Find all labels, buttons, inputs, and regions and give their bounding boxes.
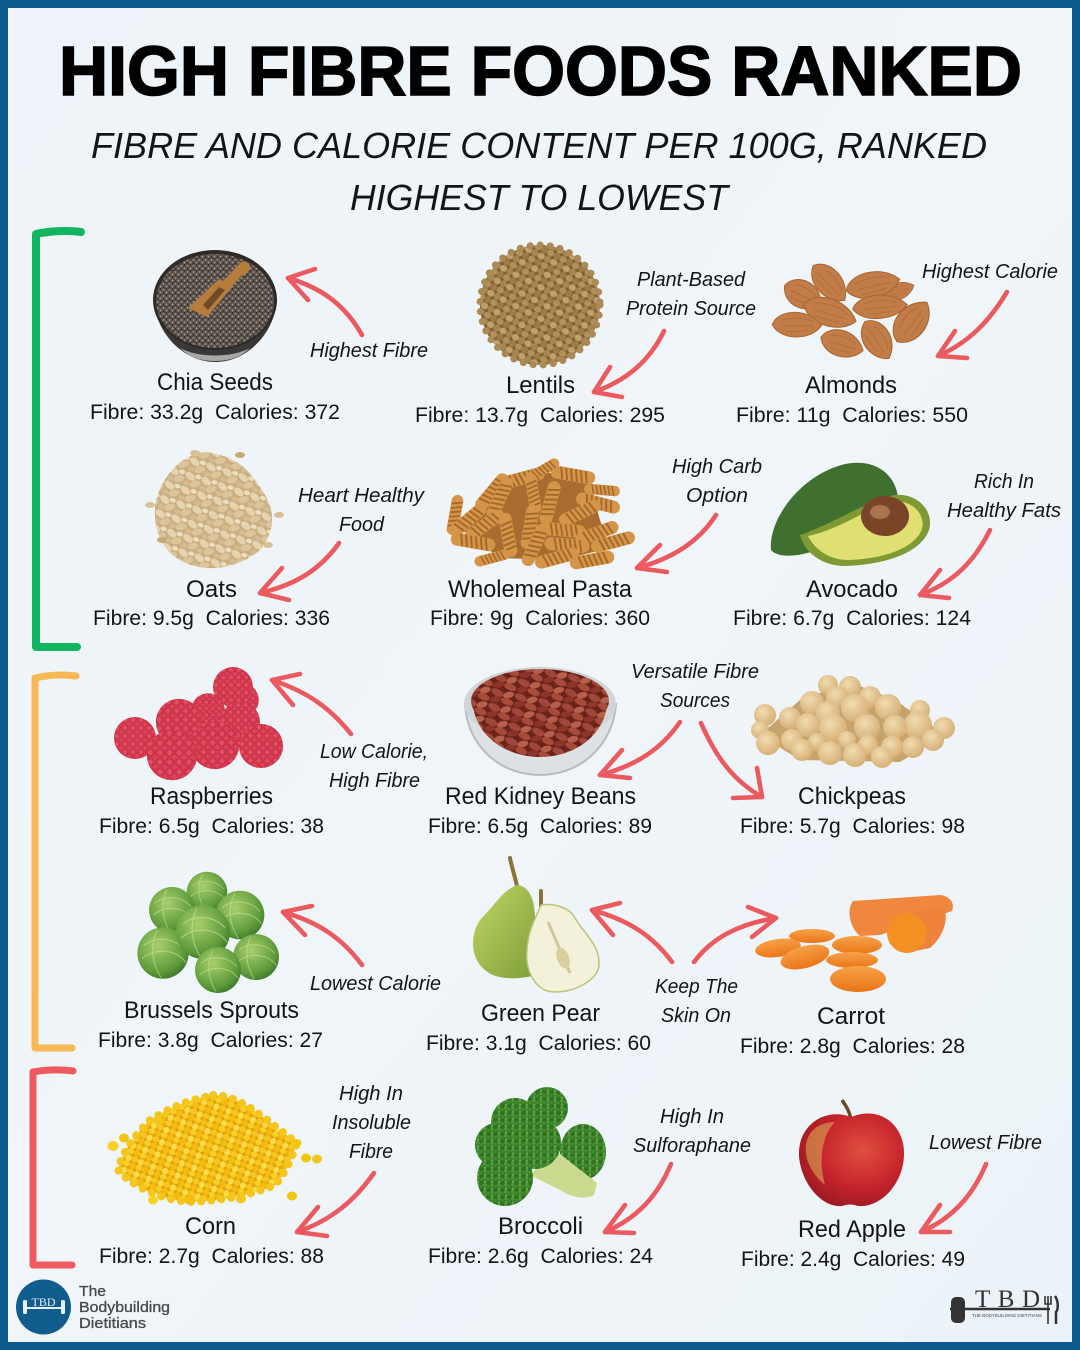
callout: high carb: Option bbox=[686, 484, 748, 507]
callout: versatile fibre bbox=[631, 660, 759, 712]
callout: heart healthy bbox=[298, 484, 426, 536]
icon: chia bowl bbox=[153, 250, 277, 362]
callout: high in insoluble fibre: Insoluble bbox=[332, 1111, 411, 1134]
food: Lentils: Lentils bbox=[506, 372, 575, 399]
callout: lowest calorie: Lowest Calorie bbox=[310, 972, 441, 995]
food: Almonds: Almonds bbox=[805, 372, 897, 399]
callout: keep the skin on: Keep The bbox=[655, 975, 738, 998]
food: Red Apple bbox=[741, 1100, 965, 1271]
icon: fusilli pile bbox=[447, 459, 630, 569]
food: Oats: Fibre: 9.5g Calories: 336 bbox=[93, 606, 330, 630]
food: Oats bbox=[93, 450, 330, 630]
callout: highest fibre: Highest Fibre bbox=[310, 339, 428, 362]
icon: pear whole and halved bbox=[473, 858, 599, 992]
food: Brussels Sprouts: Brussels Sprouts bbox=[124, 997, 299, 1024]
arrow: avocado bbox=[920, 530, 990, 598]
arrow: chia bbox=[288, 269, 362, 335]
food: Corn: Corn bbox=[185, 1213, 236, 1240]
callout: high in insoluble fibre: Fibre bbox=[349, 1140, 393, 1163]
food: Brussels Sprouts bbox=[98, 872, 323, 1052]
food: Broccoli: Broccoli bbox=[498, 1213, 583, 1240]
callout: lowest fibre: Lowest Fibre bbox=[929, 1131, 1042, 1154]
logo: The Bodybuilding Dietitians: Dietitians bbox=[79, 1315, 146, 1332]
food: Wholemeal Pasta bbox=[430, 459, 650, 630]
callout: heart healthy: Heart Healthy bbox=[298, 484, 426, 507]
title: HIGH FIBRE FOODS RANKED bbox=[59, 32, 1022, 110]
food: Broccoli: Fibre: 2.6g Calories: 24 bbox=[428, 1244, 653, 1268]
icon: glass bowl of beans bbox=[464, 667, 616, 775]
callout: low calorie bbox=[320, 740, 428, 792]
arrow: beans bbox=[600, 722, 680, 778]
food: Avocado: Avocado bbox=[806, 576, 898, 603]
food: Green Pear bbox=[426, 858, 651, 1055]
food: Chickpeas: Chickpeas bbox=[798, 783, 906, 810]
callout: high carb bbox=[672, 455, 762, 507]
callout: high in insoluble fibre: High In bbox=[339, 1082, 403, 1105]
callout: plant-based bbox=[626, 268, 756, 320]
callout: rich in: Rich In bbox=[974, 470, 1034, 493]
food: Red Kidney Beans: Red Kidney Beans bbox=[445, 783, 636, 810]
logo: The Bodybuilding Dietitians: Bodybuilding bbox=[79, 1299, 170, 1316]
icon: chickpeas pile bbox=[751, 675, 955, 768]
arrow: carrot bbox=[694, 907, 776, 962]
logo: TBD barbell: THE BODYBUILDING DIETITIANS bbox=[972, 1313, 1042, 1318]
arrow: oats bbox=[260, 543, 339, 600]
callout: keep the skin on: Skin On bbox=[661, 1004, 731, 1027]
food: Red Apple: Fibre: 2.4g Calories: 49 bbox=[741, 1247, 965, 1271]
logo: TBD barbell: TBD bbox=[975, 1286, 1040, 1313]
food: Carrot: Carrot bbox=[817, 1003, 885, 1030]
food: Red Apple: Red Apple bbox=[798, 1216, 906, 1243]
callout: rich in: Healthy Fats bbox=[947, 499, 1061, 522]
callout: plant-based: Protein Source bbox=[626, 297, 756, 320]
callout: rich in bbox=[947, 470, 1061, 522]
food: Corn: Fibre: 2.7g Calories: 88 bbox=[99, 1244, 324, 1268]
food: Raspberries: Fibre: 6.5g Calories: 38 bbox=[99, 814, 324, 838]
icon: oats pile bbox=[145, 450, 284, 568]
arrow: raspberries bbox=[272, 674, 351, 734]
food: Green Pear: Green Pear bbox=[481, 1000, 600, 1027]
logo: The Bodybuilding Dietitians: The bbox=[79, 1283, 106, 1300]
arrow: almonds bbox=[938, 292, 1007, 358]
food: Lentils: Fibre: 13.7g Calories: 295 bbox=[415, 403, 665, 427]
bracket: green tier bbox=[36, 231, 81, 647]
subtitle: HIGHEST TO LOWEST bbox=[350, 177, 731, 218]
bracket: red tier bbox=[33, 1070, 73, 1265]
icon: carrot slices bbox=[754, 895, 953, 992]
food: Chickpeas: Fibre: 5.7g Calories: 98 bbox=[740, 814, 965, 838]
callout: keep the skin on bbox=[655, 975, 738, 1027]
food: Raspberries: Raspberries bbox=[150, 783, 273, 810]
arrow: brussels sprouts bbox=[283, 906, 362, 965]
arrow: chickpeas bbox=[701, 723, 762, 798]
logo: The Bodybuilding Dietitians: TBD bbox=[32, 1295, 56, 1309]
icon: almonds bbox=[772, 257, 939, 366]
callout: versatile fibre: Versatile Fibre bbox=[631, 660, 759, 683]
logo: TBD barbell bbox=[950, 1286, 1058, 1324]
arrow: pasta bbox=[637, 515, 716, 572]
food: Corn bbox=[99, 1095, 324, 1268]
food: Carrot: Fibre: 2.8g Calories: 28 bbox=[740, 1034, 965, 1058]
logo: The Bodybuilding Dietitians bbox=[16, 1280, 170, 1334]
food: Carrot bbox=[740, 895, 965, 1058]
callout: high carb: High Carb bbox=[672, 455, 762, 478]
icon: avocado bbox=[771, 463, 930, 566]
subtitle: FIBRE AND CALORIE CONTENT PER 100G, RANKED bbox=[91, 125, 987, 166]
food: Almonds bbox=[736, 257, 968, 427]
food: Red Kidney Beans: Fibre: 6.5g Calories: 89 bbox=[428, 814, 652, 838]
food: Chia Seeds: Fibre: 33.2g Calories: 372 bbox=[90, 400, 340, 424]
icon: lentils pile bbox=[480, 245, 600, 365]
food: Wholemeal Pasta: Fibre: 9g Calories: 360 bbox=[430, 606, 650, 630]
callout: low calorie: High Fibre bbox=[329, 769, 420, 792]
callout: highest calorie: Highest Calorie bbox=[922, 260, 1058, 283]
food: Chia Seeds: Chia Seeds bbox=[157, 369, 273, 396]
arrow: broccoli bbox=[605, 1164, 671, 1233]
arrow: pear bbox=[592, 903, 672, 962]
callout: sulforaphane: Sulforaphane bbox=[633, 1134, 751, 1157]
arrow: corn bbox=[297, 1173, 374, 1236]
callout: high in insoluble fibre bbox=[332, 1082, 411, 1163]
food: Lentils bbox=[415, 245, 665, 427]
food: Chickpeas bbox=[740, 675, 965, 838]
food: Wholemeal Pasta: Wholemeal Pasta bbox=[448, 576, 633, 603]
food: Almonds: Fibre: 11g Calories: 550 bbox=[736, 403, 968, 427]
icon: raspberries bbox=[114, 667, 283, 780]
callout: low calorie: Low Calorie, bbox=[320, 740, 428, 763]
food: Chia Seeds bbox=[90, 250, 340, 424]
arrow: lentils bbox=[594, 331, 664, 397]
icon: apple bbox=[799, 1100, 904, 1206]
callout: heart healthy: Food bbox=[339, 513, 385, 536]
food: Red Kidney Beans bbox=[428, 667, 652, 838]
callout: sulforaphane: High In bbox=[660, 1105, 724, 1128]
callout: versatile fibre: Sources bbox=[660, 689, 730, 712]
callout: sulforaphane bbox=[633, 1105, 751, 1157]
bracket: orange tier bbox=[35, 675, 76, 1048]
food: Avocado: Fibre: 6.7g Calories: 124 bbox=[733, 606, 971, 630]
icon: corn kernels bbox=[108, 1095, 322, 1205]
food: Broccoli bbox=[428, 1087, 653, 1268]
food: Raspberries bbox=[99, 667, 324, 838]
food: Brussels Sprouts: Fibre: 3.8g Calories: 27 bbox=[98, 1028, 323, 1052]
subtitle bbox=[91, 125, 987, 218]
icon: brussels sprouts bbox=[137, 872, 279, 993]
food: Oats: Oats bbox=[186, 576, 237, 603]
food: Green Pear: Fibre: 3.1g Calories: 60 bbox=[426, 1031, 651, 1055]
arrow: apple bbox=[921, 1164, 986, 1232]
callout: plant-based: Plant-Based bbox=[637, 268, 746, 291]
icon: broccoli bbox=[475, 1087, 606, 1206]
food: Avocado bbox=[733, 463, 971, 630]
